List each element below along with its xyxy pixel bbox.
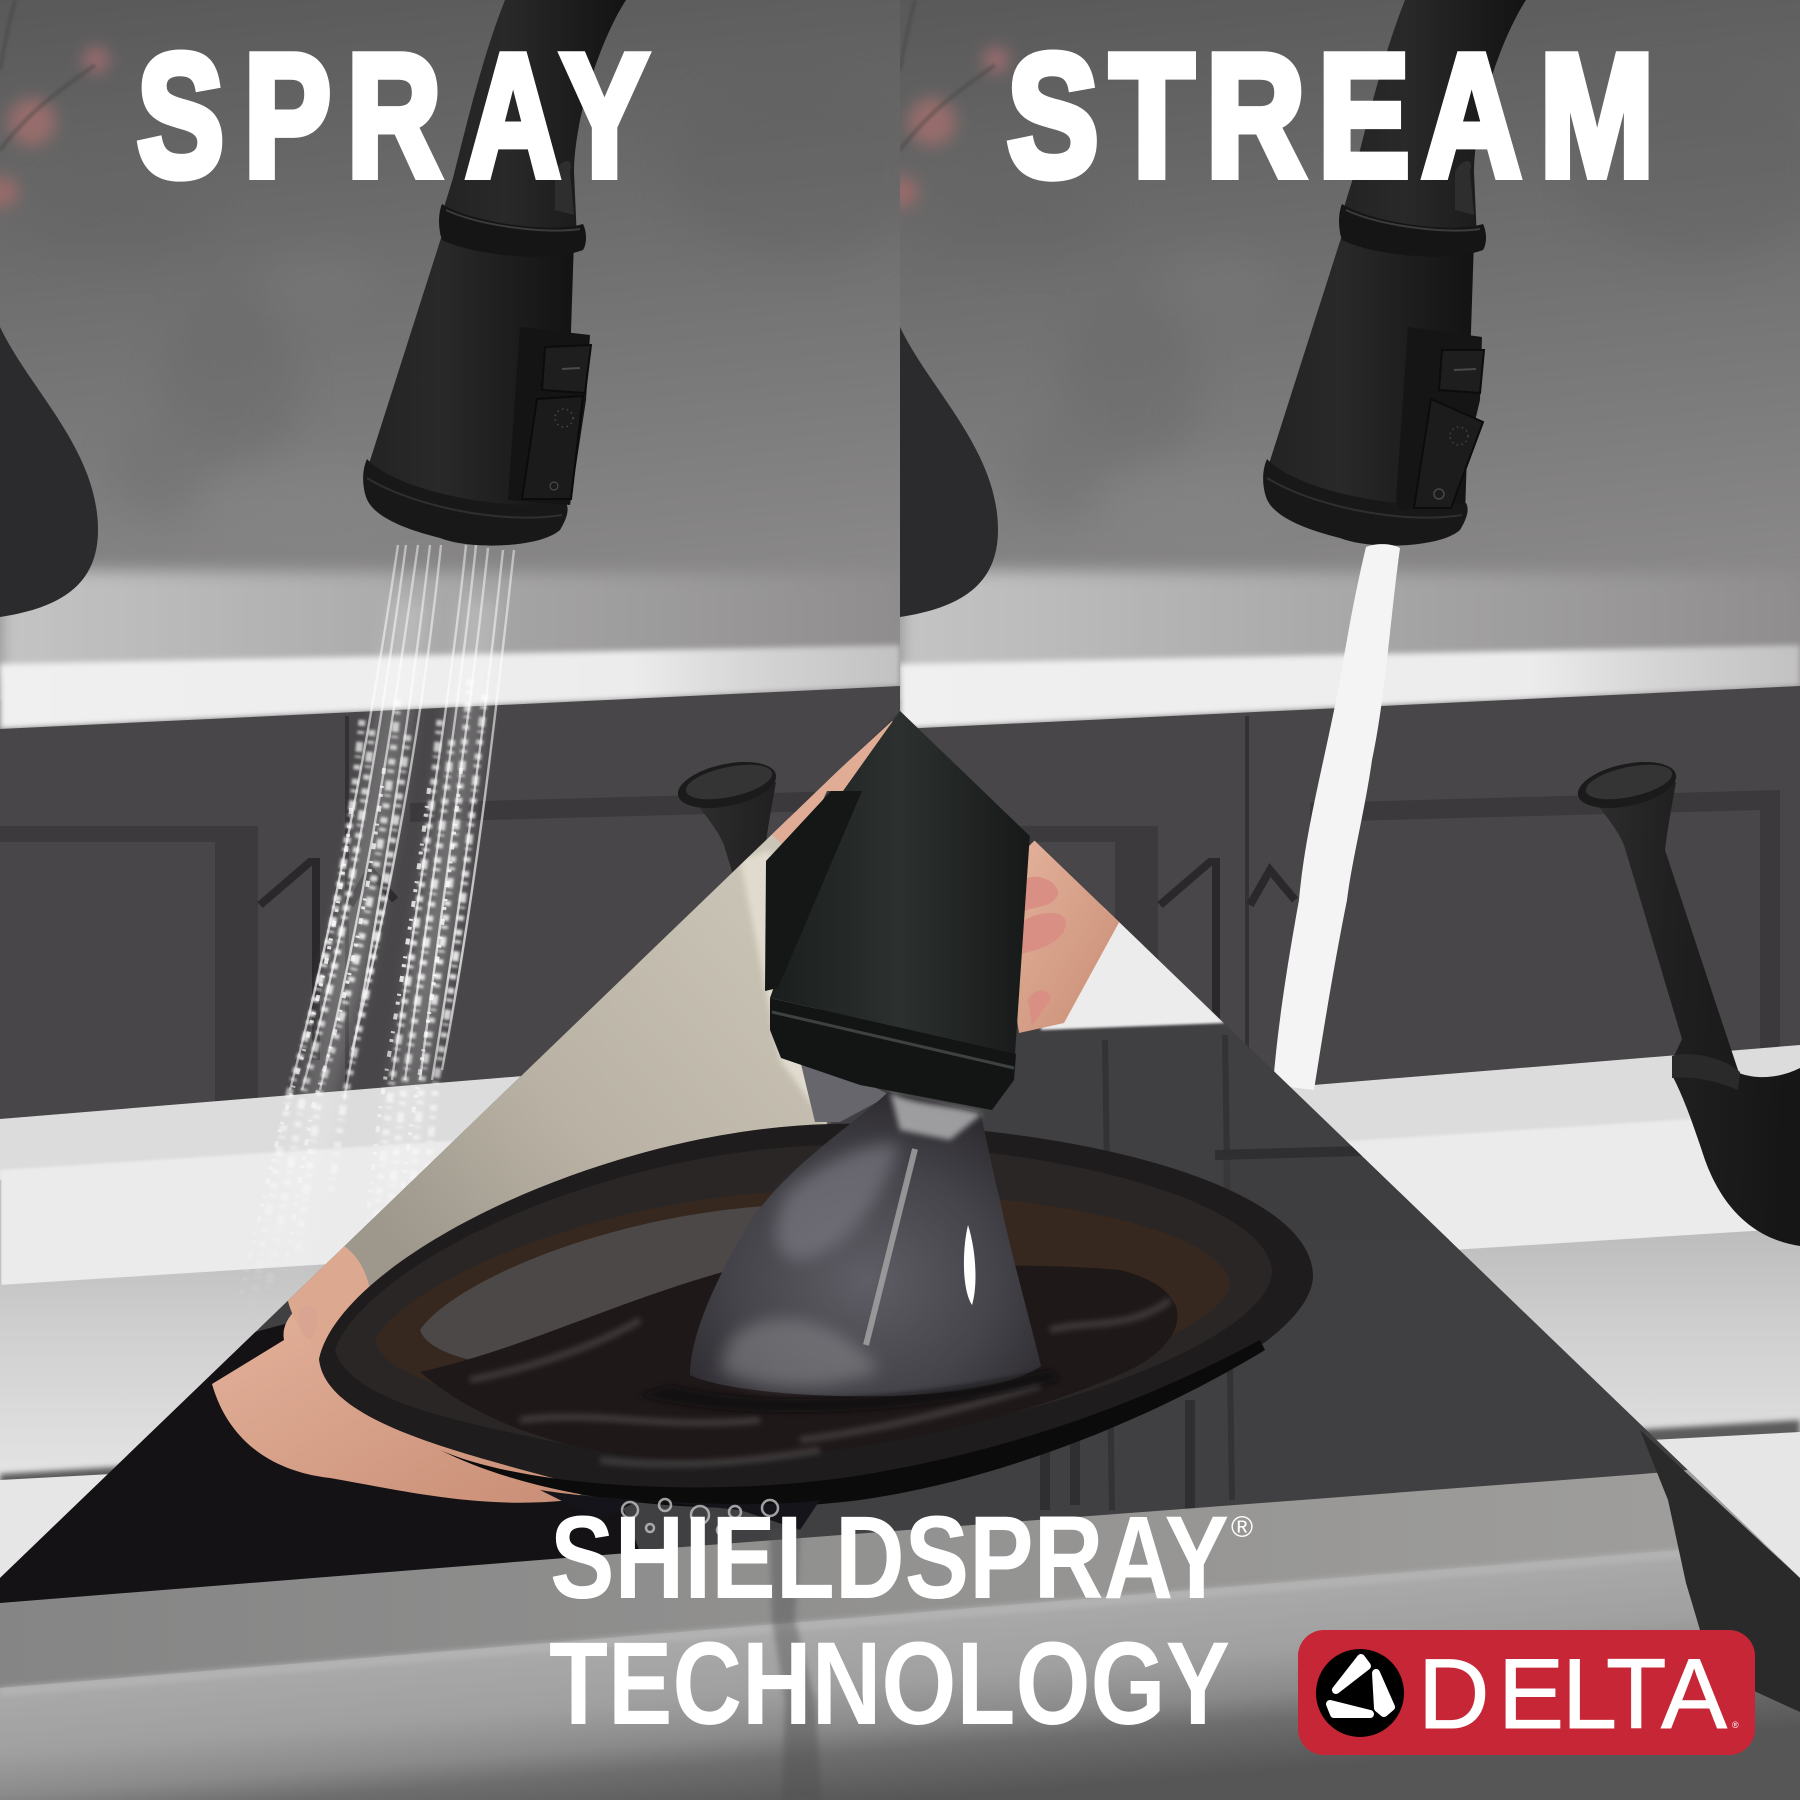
wordmark: DELTA — [1418, 1638, 1727, 1749]
dark sleeve — [0, 1320, 640, 1603]
logo: delta — [1298, 1630, 1755, 1755]
water spray streams — [271, 544, 516, 1183]
kitchen background scene, repeated — [886, 0, 1800, 1700]
icon: spray button housing — [508, 327, 591, 505]
hand fingers right — [1017, 840, 1119, 1033]
cabinet details — [930, 820, 1640, 1510]
heading: stream: STREAM — [1007, 19, 1654, 213]
water dome — [640, 1092, 1060, 1412]
hand holding plate — [212, 1245, 590, 1503]
icon: faucet base in lower right corner — [1640, 1430, 1800, 1712]
cabinet background — [0, 711, 1800, 1578]
icon: faucet handle — [674, 754, 900, 1246]
panel: spray — [0, 0, 900, 1578]
icon: stream faucet head — [1263, 0, 1526, 546]
kitchen background scene — [0, 0, 930, 1700]
icon: delta emblem — [1316, 1649, 1404, 1737]
heading: shieldspray: SHIELDSPRAY — [550, 1492, 1229, 1624]
hand fingers top left — [772, 721, 893, 844]
falling water — [769, 1538, 818, 1788]
panel: shieldspray — [0, 700, 1800, 1800]
heading: technology: TECHNOLOGY — [549, 1618, 1230, 1750]
panel: stream — [886, 0, 1800, 1700]
registered mark small: ® — [1732, 1720, 1739, 1730]
heading: spray: SPRAY — [137, 18, 648, 213]
registered mark: ® — [1231, 1511, 1253, 1544]
plate — [319, 1124, 1313, 1535]
faucet head upside down — [765, 711, 1030, 1110]
sweater — [298, 818, 886, 1291]
icon: stream button housing — [1396, 327, 1484, 510]
sink edge and bottom basin — [0, 1460, 1800, 1800]
water stream — [1273, 544, 1400, 1090]
icon: spray faucet head — [363, 0, 626, 546]
